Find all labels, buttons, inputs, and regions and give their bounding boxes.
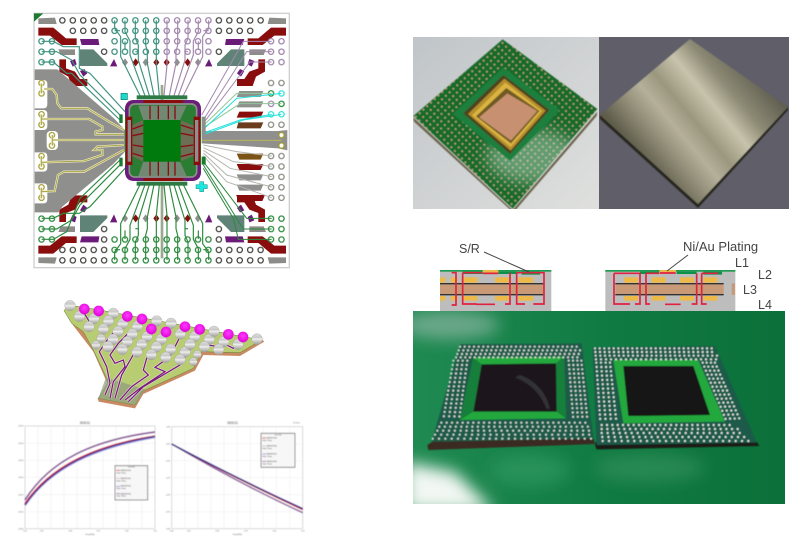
label L2: L2	[758, 268, 772, 282]
panel: 3D package model	[63, 300, 264, 408]
x axis labels: 1.00	[273, 531, 276, 533]
legend: dB(S(Diff2,Diff2))	[121, 478, 131, 480]
y axis labels	[166, 426, 170, 530]
substrate side wall	[63, 313, 264, 408]
photo: two ball grid array packages	[400, 311, 785, 512]
y axis labels: -0.10	[166, 460, 170, 462]
x axis labels: 0.75	[244, 531, 248, 533]
x axis labels: Freq [GHz]	[233, 534, 242, 536]
chart title SDD21: SDD21	[227, 421, 238, 425]
chart: SDD21	[166, 421, 304, 536]
legend: Setup1 : Sweep	[116, 487, 126, 490]
x axis labels: 0.25	[187, 531, 190, 533]
y axis labels: -45.00	[18, 511, 23, 513]
diamond via row	[110, 58, 212, 222]
corner pads	[38, 18, 286, 264]
y axis labels: -35.00	[18, 477, 23, 479]
x axis labels: 1.25	[153, 531, 157, 533]
board glare	[487, 130, 580, 183]
y axis labels: -0.20	[166, 494, 170, 496]
y axis labels	[18, 426, 23, 530]
transition neck	[98, 377, 145, 405]
panel: substrate layout	[34, 13, 289, 268]
right side pads	[236, 91, 265, 201]
x axis labels: 1.25	[301, 531, 304, 533]
right side fan-out traces	[202, 41, 282, 239]
legend: dB(S(Diff1,Diff1))	[121, 470, 131, 472]
y axis labels: -40.00	[18, 494, 23, 496]
left ground plane	[35, 69, 125, 212]
right plane	[202, 130, 287, 150]
via keepout island	[47, 131, 58, 150]
fiducial: teal square	[121, 93, 127, 100]
x axis labels: 0.50	[69, 531, 72, 533]
x axis labels: 0.10	[23, 531, 27, 533]
y axis labels: -0.25	[166, 511, 170, 513]
legend	[115, 466, 148, 500]
layout frame	[34, 13, 289, 268]
die package outline	[119, 95, 206, 186]
legend: dB(S(Diff4,Diff8))	[267, 461, 277, 463]
y axis labels: -30.00	[18, 460, 23, 462]
legend: Setup1 : Sweep	[262, 455, 272, 458]
leader line: Ni/Au plating	[667, 255, 688, 271]
legend: dB(S(Diff4,Diff4))	[121, 493, 131, 495]
olive differential traces	[41, 83, 124, 198]
gold cavity ring	[463, 75, 549, 154]
photo: substrate with gold cavity	[413, 37, 599, 213]
left package	[427, 343, 595, 450]
y axis labels: -0.15	[166, 477, 170, 479]
cavity surround	[453, 67, 560, 161]
solder balls	[65, 300, 262, 366]
legend: Setup1 : Sweep	[116, 471, 126, 474]
plate top	[600, 39, 788, 204]
board shadow	[413, 112, 597, 213]
chart: SDD11	[18, 421, 157, 536]
x axis labels: 0.50	[216, 531, 219, 533]
legend: Setup1 : Sweep	[262, 447, 272, 450]
x axis labels	[170, 531, 304, 536]
panel: cross-section diagram	[440, 239, 772, 313]
legend	[261, 433, 295, 467]
legend: Setup1 : Sweep	[262, 439, 272, 442]
die paddle	[143, 120, 181, 162]
curves	[25, 432, 155, 505]
y axis labels: 0.00	[166, 426, 170, 428]
x axis labels: 1.00	[125, 531, 128, 533]
y axis labels: -20.00	[18, 426, 23, 428]
legend: dB(S(Diff1,Diff5))	[267, 438, 277, 440]
label L3: L3	[743, 283, 757, 297]
legend: dB(S(Diff2,Diff6))	[267, 446, 277, 448]
x axis labels: Freq [GHz]	[86, 534, 95, 536]
pin pad array	[413, 39, 597, 209]
plot area	[25, 426, 155, 529]
legend: Setup1 : Sweep	[262, 462, 272, 465]
legend: dB(S(Diff3,Diff3))	[121, 486, 131, 488]
label Ni/Au Plating: Ni/Au Plating	[683, 239, 758, 254]
x axis labels: 0.75	[97, 531, 100, 533]
routed traces	[84, 313, 243, 402]
fiducial: cyan cross	[196, 182, 207, 192]
legend: Setup1 : Sweep	[116, 479, 126, 482]
y axis labels: -0.30	[166, 528, 170, 530]
left corner traces	[42, 41, 125, 120]
top and bottom signal fan-out traces	[115, 20, 209, 260]
legend: Curve Info	[275, 433, 282, 436]
legend: Curve Info	[128, 466, 135, 469]
table glare	[400, 311, 705, 512]
stack-up left	[440, 270, 551, 313]
plate edge	[600, 107, 788, 208]
copper die pad	[479, 93, 537, 141]
label L4: L4	[758, 298, 772, 312]
legend: Setup1 : Sweep	[116, 495, 126, 498]
chart tag: XY Plot 2	[293, 421, 300, 424]
y axis labels: -50.00	[18, 528, 23, 530]
signal balls, magenta	[79, 304, 248, 342]
x axis labels: 0.25	[40, 531, 43, 533]
x axis labels: 0.00	[170, 531, 173, 533]
chart title SDD11: SDD11	[80, 421, 90, 425]
y axis labels: -25.00	[18, 443, 23, 445]
label S/R: S/R	[459, 242, 480, 256]
right package	[593, 346, 759, 449]
green board	[413, 39, 597, 209]
curves	[172, 444, 303, 513]
pin one corner marker	[34, 13, 43, 22]
via grid rings	[36, 15, 287, 266]
plot area	[172, 427, 303, 529]
stack-up right	[605, 270, 735, 313]
x axis labels	[23, 531, 157, 536]
photo: metal lid plate	[599, 37, 789, 209]
leader line: S/R	[484, 252, 529, 272]
y axis labels: -0.05	[166, 443, 170, 445]
substrate top surface	[64, 305, 262, 405]
legend: dB(S(Diff3,Diff7))	[267, 454, 277, 456]
label L1: L1	[735, 256, 749, 270]
